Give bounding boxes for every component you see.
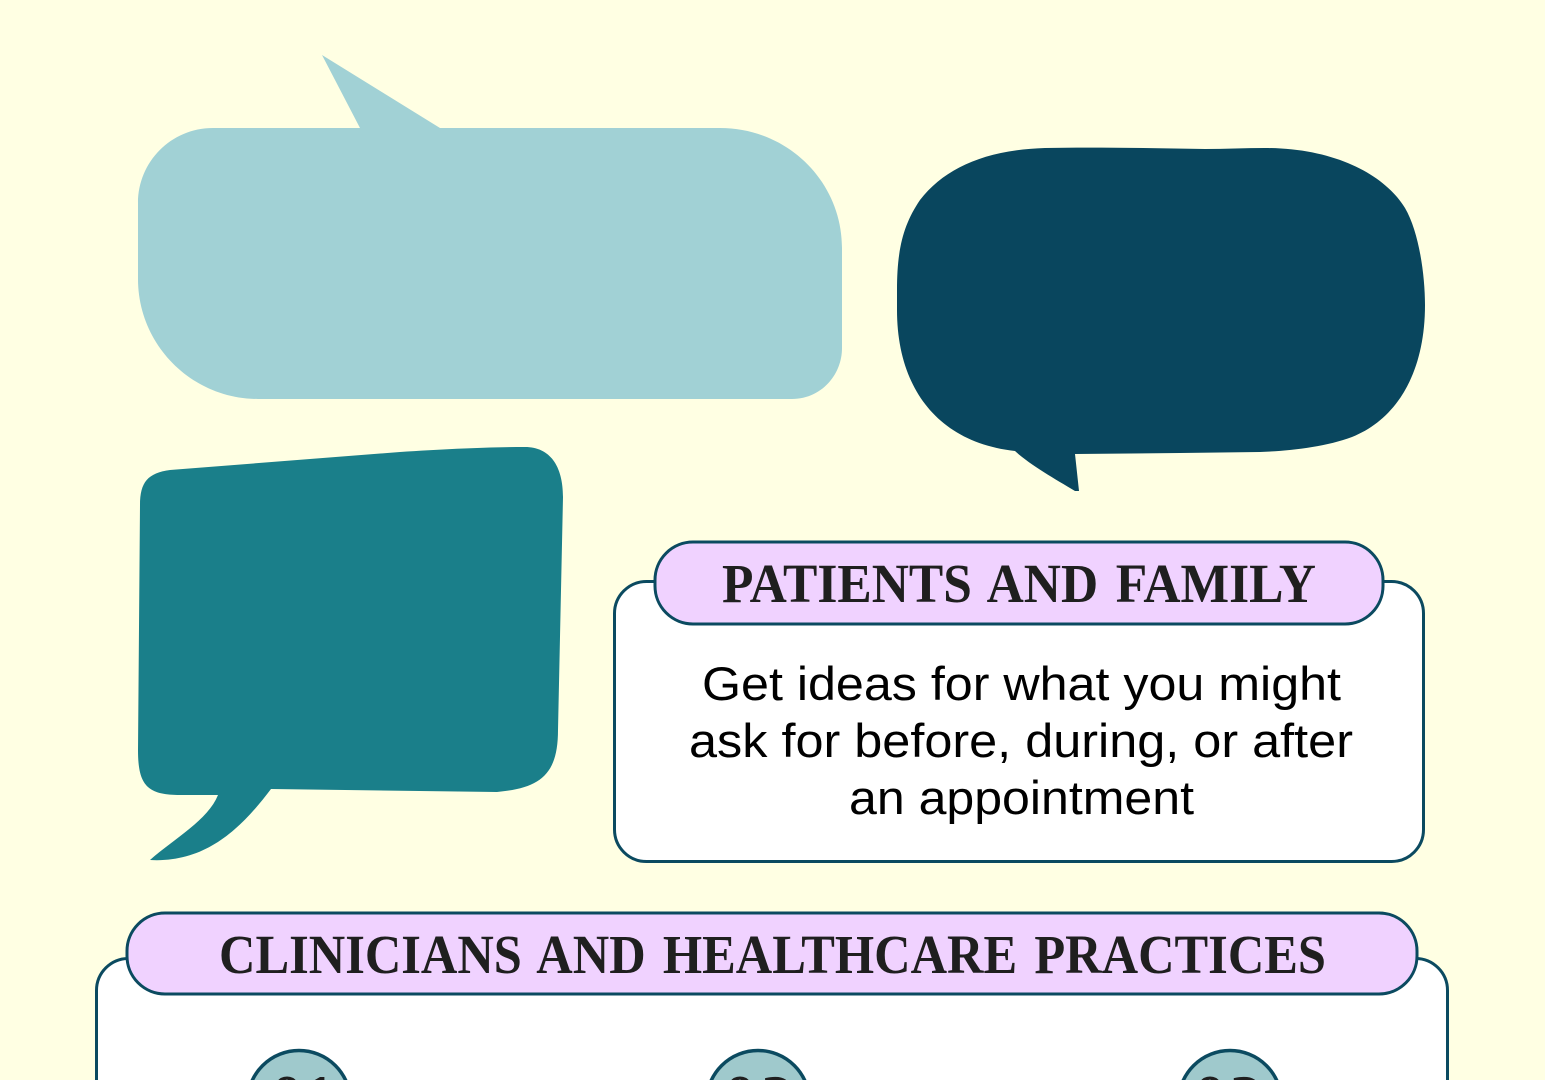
text block: patients and family description: ask for before, during, or after (689, 714, 1353, 767)
text block: patients and family description: an appointment (849, 771, 1194, 824)
heading pill: patients and family: PATIENTS AND FAMILY (722, 553, 1316, 614)
text block: patients and family description (689, 657, 1353, 824)
speech bubble: dark navy teal (897, 148, 1425, 491)
heading pill: clinicians and healthcare practices (127, 913, 1417, 994)
speech bubble: light teal (138, 55, 842, 399)
number badge 01 (248, 1050, 350, 1080)
number badge 02 (706, 1050, 810, 1080)
text block: patients and family description: Get ideas for what you might (702, 657, 1341, 710)
number badge 03 (1178, 1050, 1282, 1080)
speech bubble: mid teal (138, 447, 563, 860)
heading pill: clinicians and healthcare practices: CLINICIANS AND HEALTHCARE PRACTICES (219, 924, 1326, 985)
panel: clinicians and healthcare practices (96, 913, 1448, 1080)
heading pill: patients and family (655, 542, 1383, 624)
card: clinicians and healthcare practices body (96, 958, 1448, 1080)
panel: patients and family (614, 542, 1424, 862)
card: patients and family body (614, 582, 1424, 862)
